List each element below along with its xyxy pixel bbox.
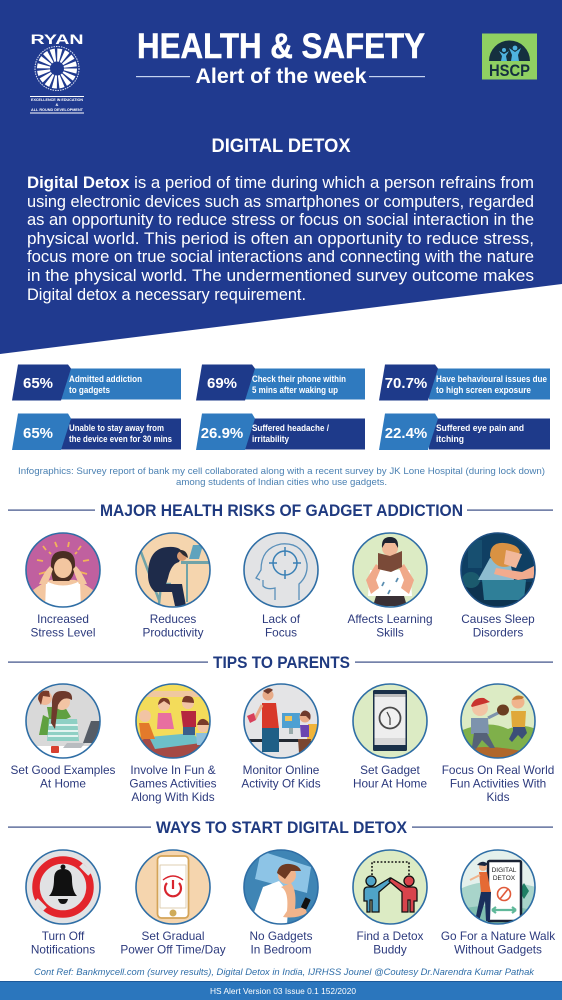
label: good examples: At Home xyxy=(40,776,86,790)
stat: 26.9% headache: irritability xyxy=(252,434,289,444)
icon: nature walk: DETOX xyxy=(493,875,516,882)
label: sleep: Disorders xyxy=(473,626,523,640)
header background panel xyxy=(0,0,562,354)
label: gradual power off: Set Gradual xyxy=(142,929,204,943)
heading: major health risks: MAJOR HEALTH RISKS OF GADGET ADDICTION xyxy=(100,502,463,520)
survey source note: Infographics: Survey report of bank my cell collaborated along with a recent survey by JK Lone Hospital (during lock down) xyxy=(18,466,545,477)
stat: 65% addiction: Admitted addiction xyxy=(69,374,142,384)
intro text block: Digital Detox is a period of time during which a person refrains from xyxy=(27,173,534,192)
stat: 69% phone check: 69% xyxy=(207,375,237,392)
stat: 65% addiction: 65% xyxy=(23,375,53,392)
label: real world activities: Focus On Real World xyxy=(442,763,554,777)
label: focus: Focus xyxy=(265,626,297,640)
logo: Ryan: RYAN xyxy=(30,32,84,47)
label: monitor activity: Monitor Online xyxy=(243,763,319,777)
heading: ways to start digital detox: WAYS TO START DIGITAL DETOX xyxy=(156,819,407,837)
title xyxy=(136,27,425,88)
label: nature walk: Without Gadgets xyxy=(454,942,542,956)
icon: stress xyxy=(25,532,101,610)
label: notifications off: Notifications xyxy=(31,942,95,956)
label: gadget hour: Hour At Home xyxy=(353,776,427,790)
icon: monitor activity xyxy=(243,683,319,759)
stat: 70.7% behaviour: to high screen exposure xyxy=(436,385,531,395)
stat: 26.9% headache xyxy=(196,414,365,450)
label: detox buddy: Buddy xyxy=(373,942,407,956)
label: fun and games: Involve In Fun & xyxy=(130,763,216,777)
footer bar: HS Alert Version 03 Issue 0.1 152/2020 xyxy=(210,987,357,996)
icon: good examples xyxy=(25,683,101,760)
logo: Ryan xyxy=(30,32,84,114)
label: learning: Skills xyxy=(376,626,404,640)
reference line: Cont Ref: Bankmycell.com (survey results), Digital Detox in India, IJRHSS Jounel @Coutesy Dr.Narendra Kumar Pathak xyxy=(34,967,535,978)
stat: 65% unable to stay away xyxy=(12,414,181,450)
icon: no gadgets in bedroom xyxy=(243,849,319,925)
stat: 70.7% behaviour xyxy=(379,364,550,400)
icon: detox buddy xyxy=(352,849,428,925)
stat: 65% addiction xyxy=(12,364,181,400)
stat: 69% phone check: Check their phone within xyxy=(252,374,346,384)
stat: 69% phone check: 5 mins after waking up xyxy=(252,385,338,395)
label: real world activities: Fun Activities With xyxy=(450,776,546,790)
icon: learning xyxy=(352,532,428,608)
icon: gradual power off xyxy=(135,849,211,925)
stat: 70.7% behaviour: Have behavioural issues due xyxy=(436,374,547,384)
label: productivity: Productivity xyxy=(143,626,204,640)
heading: tips to parents: TIPS TO PARENTS xyxy=(213,654,350,672)
intro text block: as an opportunity to reduce stress or focus on social interaction in the xyxy=(27,210,534,229)
label: fun and games: Games Activities xyxy=(129,776,217,790)
stat: 65% unable to stay away: Unable to stay away from xyxy=(69,423,164,433)
label: focus: Lack of xyxy=(262,612,300,626)
heading: Digital Detox: DIGITAL DETOX xyxy=(212,136,351,157)
label: stress: Stress Level xyxy=(31,626,95,640)
logo: Ryan: EXCELLENCE IN EDUCATION xyxy=(31,97,83,102)
label: no gadgets in bedroom: No Gadgets xyxy=(250,929,312,943)
label: fun and games: Along With Kids xyxy=(131,790,215,804)
title: HEALTH & SAFETY xyxy=(137,27,425,66)
stat: 65% unable to stay away: the device even for 30 mins xyxy=(69,434,172,444)
logo: Ryan: ALL ROUND DEVELOPMENT xyxy=(31,107,84,112)
label: good examples: Set Good Examples xyxy=(11,763,115,777)
icon: nature walk xyxy=(460,849,536,925)
icon: sleep xyxy=(460,532,536,608)
intro text block xyxy=(27,173,534,304)
label: nature walk: Go For a Nature Walk xyxy=(441,929,555,943)
survey source note xyxy=(18,466,545,488)
intro text block: using electronic devices such as smartphones or computers, regarded xyxy=(27,192,534,211)
icon: productivity xyxy=(135,532,211,608)
label: detox buddy: Find a Detox xyxy=(357,929,423,943)
icon: focus xyxy=(243,532,319,608)
label: no gadgets in bedroom: In Bedroom xyxy=(251,942,312,956)
stat: 70.7% behaviour: 70.7% xyxy=(385,375,427,392)
stat: 26.9% headache: 26.9% xyxy=(201,425,243,442)
stat: 26.9% headache: Suffered headache / xyxy=(252,423,329,433)
footer bar xyxy=(0,981,562,1000)
logo: HSCP: HSCP xyxy=(489,61,530,80)
label: monitor activity: Activity Of Kids xyxy=(241,776,321,790)
icon: nature walk: DIGITAL xyxy=(492,867,517,874)
label: productivity: Reduces xyxy=(150,612,196,626)
label: sleep: Causes Sleep xyxy=(461,612,535,626)
intro text block: in the physical world. The undermentioned survey outcome makes xyxy=(27,266,534,285)
logo: HSCP xyxy=(482,34,537,80)
label: learning: Affects Learning xyxy=(347,612,433,626)
label: gadget hour: Set Gadget xyxy=(360,763,420,777)
label: stress: Increased xyxy=(37,612,89,626)
icon: fun and games xyxy=(135,683,211,759)
intro text block: Digital detox a necessary requirement. xyxy=(27,285,306,304)
icon: real world activities xyxy=(460,683,536,759)
icon: gadget hour xyxy=(352,683,428,759)
label: notifications off: Turn Off xyxy=(42,929,84,943)
label: gradual power off: Power Off Time/Day xyxy=(120,942,226,956)
title: Alert of the week xyxy=(196,65,367,88)
stat: 22.4% eye pain: 22.4% xyxy=(385,425,427,442)
stat: 65% unable to stay away: 65% xyxy=(23,425,53,442)
label: real world activities: Kids xyxy=(487,790,510,804)
icon: notifications off xyxy=(25,849,101,925)
stat: 22.4% eye pain xyxy=(379,414,550,450)
stat: 22.4% eye pain: Suffered eye pain and xyxy=(436,423,524,433)
logo: Ryan: & xyxy=(56,102,59,107)
stat: 22.4% eye pain: itching xyxy=(436,434,464,444)
survey source note: among students of Indian cities who use gadgets. xyxy=(176,477,387,488)
intro text block: focus more on true social interactions and connecting with the nature xyxy=(27,247,534,266)
stat: 65% addiction: to gadgets xyxy=(69,385,110,395)
intro text block: physical world. This period is often an opportunity to reduce stress, xyxy=(27,229,534,248)
stat: 69% phone check xyxy=(196,364,365,400)
